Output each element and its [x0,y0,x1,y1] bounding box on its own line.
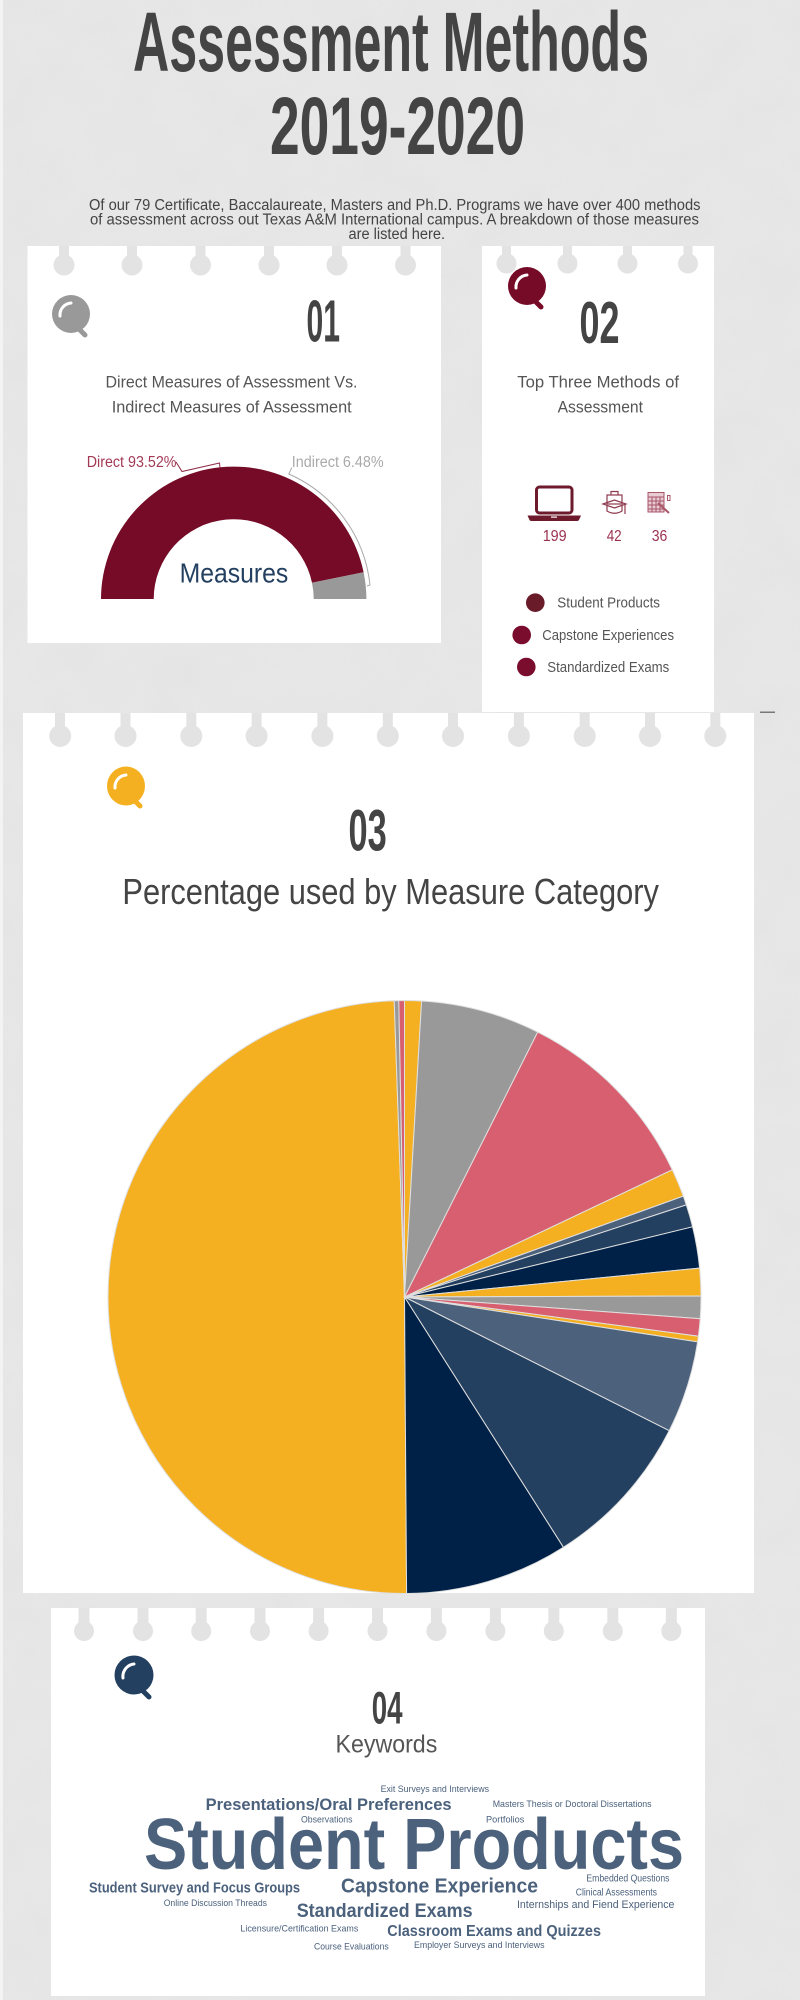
panel: 02 top three methods [482,246,714,712]
number 04: 04 [372,1682,402,1733]
intro text [89,197,701,243]
icon: orange magnifier [107,766,145,806]
icon: navy magnifier [114,1656,154,1697]
icon: calculator grid and pencil [648,492,670,513]
pie chart [108,1000,701,1594]
legend: Student Products [557,596,660,612]
panel 2 heading: Top Three Methods of [517,372,679,392]
notebook holes panel 3 [49,713,726,747]
intro text: of assessment across out Texas A&M International campus. A breakdown of those measures [90,212,699,228]
icon: grey magnifier [52,295,90,335]
intro text: Of our 79 Certificate, Baccalaureate, Masters and Ph.D. Programs we have over 400 methods [89,197,701,214]
word cloud: Online Discussion Threads [164,1898,267,1909]
gauge chart: Direct 93.52% [87,454,177,471]
title [133,0,649,172]
title: 2019-2020 [270,81,525,172]
notebook holes panel 4 [74,1608,681,1641]
gauge chart: Indirect 6.48% [292,454,384,471]
legend: Standardized Exams [547,660,669,676]
word cloud: Clinical Assessments [576,1888,657,1899]
icon values: 199 [543,528,567,545]
notebook holes panel 2 [496,246,698,274]
word cloud: Student Survey and Focus Groups [89,1880,300,1897]
word cloud: Exit Surveys and Interviews [381,1784,489,1795]
legend [512,593,674,676]
icon values: 36 [652,528,667,545]
panel: 01 direct vs indirect [28,246,441,643]
word cloud: Course Evaluations [314,1942,389,1953]
panel 3 heading: Percentage used by Measure Category [122,871,659,912]
word cloud: Employer Surveys and Interviews [414,1940,545,1951]
word cloud: Embedded Questions [586,1874,670,1885]
icon: graduation cap and briefcase [603,492,626,514]
word cloud: Internships and Fiend Experience [517,1899,674,1911]
gauge chart [87,454,384,599]
notebook holes panel 1 [54,246,416,276]
panel 1 heading: Indirect Measures of Assessment [112,398,352,416]
word cloud: Capstone Experience [341,1876,538,1898]
icon: maroon magnifier [508,267,546,307]
word cloud: Licensure/Certification Exams [240,1924,359,1935]
panel 4 heading: Keywords [336,1731,437,1759]
number 01: 01 [306,288,340,354]
word cloud [89,1784,684,1953]
number 03: 03 [348,798,387,863]
panel: 03 percentage by category [23,713,754,1594]
icon values: 42 [607,528,622,545]
icon values [543,528,667,545]
word cloud: Standardized Exams [297,1901,473,1922]
number 02: 02 [580,290,620,356]
legend: Capstone Experiences [542,628,674,644]
word cloud: Masters Thesis or Doctoral Dissertations [493,1799,652,1810]
icon: laptop [528,487,581,521]
panel 1 heading [106,372,358,416]
panel 1 heading: Direct Measures of Assessment Vs. [106,372,358,392]
word cloud: Student Products [144,1805,684,1885]
panel: 04 keywords [51,1608,705,1996]
word cloud: Observations [301,1815,353,1826]
word cloud: Portfolios [486,1815,525,1826]
gauge chart: Measures [180,558,288,589]
word cloud: Presentations/Oral Preferences [206,1795,452,1814]
intro text: are listed here. [348,226,445,243]
panel 2 heading: Assessment [558,398,643,416]
word cloud: Classroom Exams and Quizzes [387,1923,601,1940]
panel 2 heading [517,372,679,416]
